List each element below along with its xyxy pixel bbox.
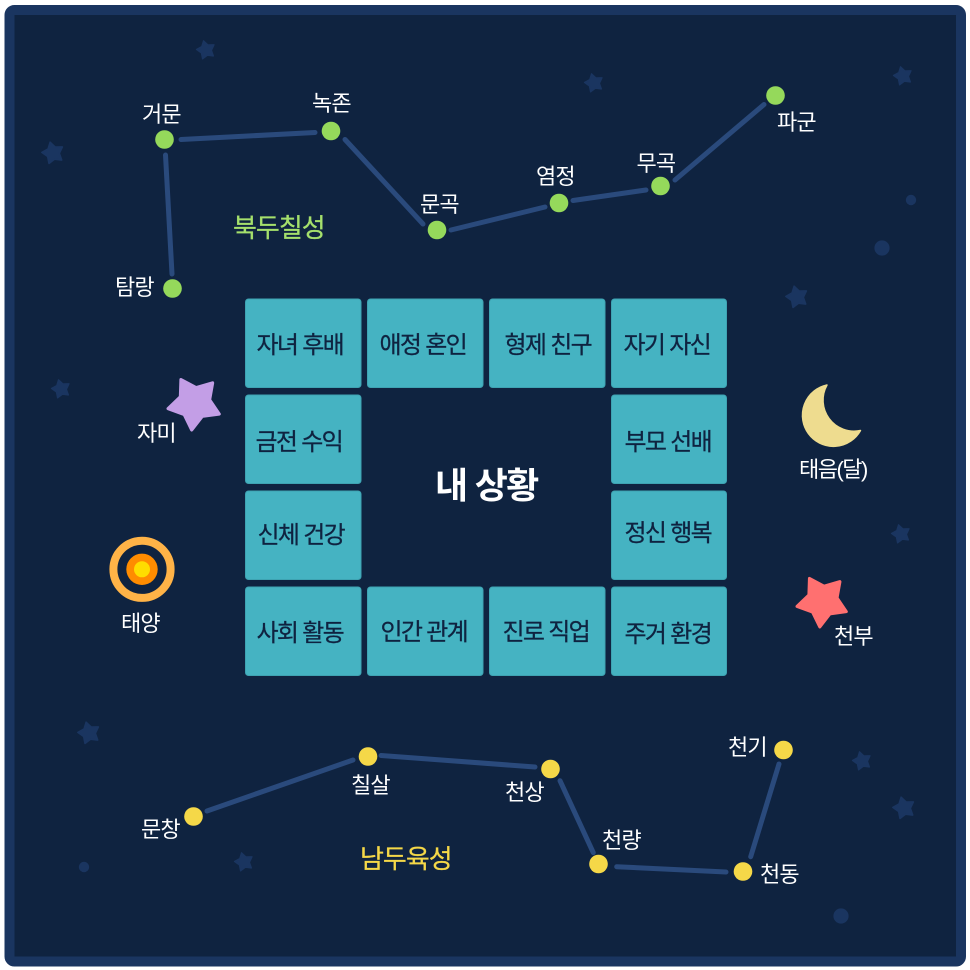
label: 태음(달): 태음(달) xyxy=(799,457,867,482)
grid cell labels: 인간 관계 xyxy=(380,619,467,646)
connecting lines: Southern Dipper xyxy=(207,756,779,872)
grid cell labels: 부모 선배 xyxy=(624,429,711,456)
grid cell labels: 자녀 후배 xyxy=(256,332,343,359)
icon: sun 태양 xyxy=(113,541,171,598)
grid cell labels: 애정 혼인 xyxy=(380,332,466,359)
star names: Southern Dipper: 천량 xyxy=(602,828,641,853)
grid cell labels: 금전 수익 xyxy=(256,429,342,456)
star names: Big Dipper: 탐랑 xyxy=(115,275,154,300)
heading: 북두칠성: 북두칠성 xyxy=(233,213,325,243)
grid: life areas xyxy=(246,299,726,676)
label: 태양: 태양 xyxy=(121,611,160,636)
star names: Southern Dipper: 문창 xyxy=(141,817,180,842)
star names: Southern Dipper xyxy=(141,735,799,887)
grid cell labels: 형제 친구 xyxy=(504,332,592,359)
star nodes: Southern Dipper xyxy=(184,741,793,881)
star names: Southern Dipper: 천동 xyxy=(760,862,799,887)
star names: Southern Dipper: 천상 xyxy=(505,780,544,805)
label: 천부: 천부 xyxy=(834,624,873,649)
connecting lines: Big Dipper xyxy=(166,104,764,274)
grid cell labels xyxy=(256,332,712,648)
grid cell labels: 진로 직업 xyxy=(502,619,589,646)
star nodes: Big Dipper xyxy=(155,86,785,298)
grid cell labels: 정신 행복 xyxy=(624,520,712,547)
icon: purple star 자미 xyxy=(159,367,228,435)
star names: Big Dipper xyxy=(115,91,816,300)
heading: 남두육성: 남두육성 xyxy=(360,844,452,874)
star names: Big Dipper: 무곡 xyxy=(636,151,676,176)
star names: Big Dipper: 염정 xyxy=(536,164,575,189)
icon: red star 천부 xyxy=(788,566,854,632)
grid cell labels: 자기 자신 xyxy=(624,332,710,359)
center title: 내 상황: 내 상황 xyxy=(435,465,539,506)
grid cell backgrounds xyxy=(246,299,726,676)
grid cell labels: 신체 건강 xyxy=(258,522,346,549)
star names: Big Dipper: 문곡 xyxy=(420,192,459,217)
star names: Southern Dipper: 천기 xyxy=(728,735,767,760)
icon: crescent moon 태음 xyxy=(802,385,860,446)
constellation: Southern Dipper (남두육성) xyxy=(141,735,799,887)
constellation: Big Dipper (북두칠성) xyxy=(115,86,816,300)
star names: Big Dipper: 거문 xyxy=(142,102,181,127)
grid cell labels: 사회 활동 xyxy=(256,620,344,647)
star names: Southern Dipper: 칠살 xyxy=(351,773,390,798)
grid cell labels: 주거 환경 xyxy=(624,621,711,648)
star names: Big Dipper: 녹존 xyxy=(312,91,351,116)
label: 자미: 자미 xyxy=(137,421,176,446)
star names: Big Dipper: 파군 xyxy=(777,110,816,135)
